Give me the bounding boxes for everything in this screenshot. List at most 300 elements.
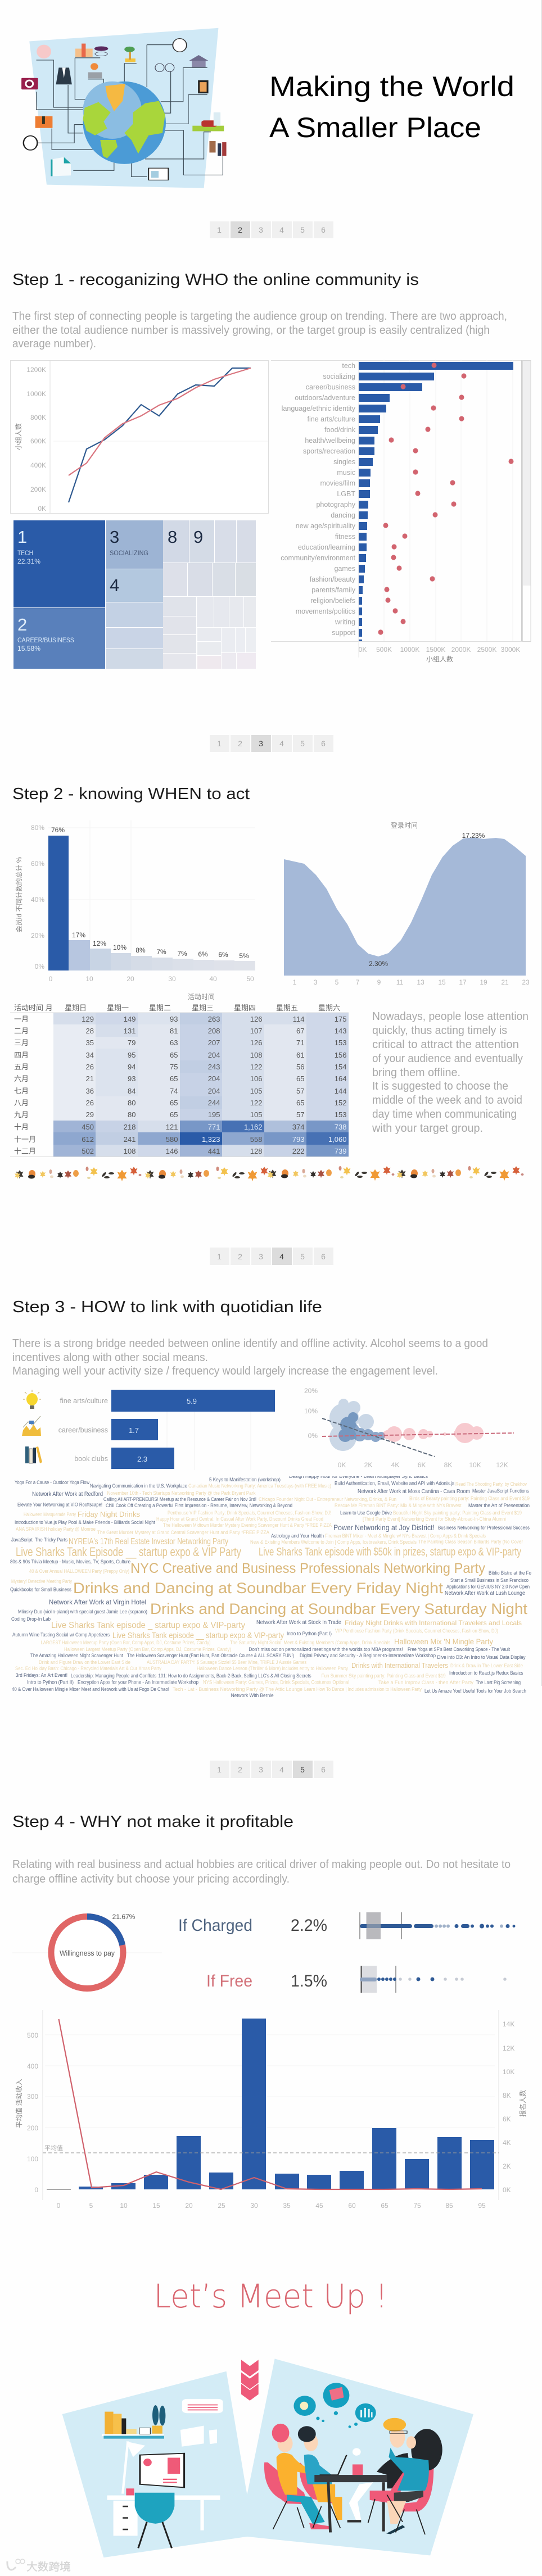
text block: when to act: of your audience and eventually bbox=[372, 1053, 523, 1065]
bar chart: member share by activity time: 10% bbox=[113, 944, 127, 951]
word cloud: event titles bbox=[10, 1473, 531, 1698]
pagination: page 4 active: 1 bbox=[217, 1252, 222, 1261]
heatmap table: month by weekday: 580 bbox=[166, 1135, 178, 1144]
word cloud: event titles: AUSTRALIA DAY PARTY: $ Sausage Sizzle! $5 Beer Wine, TRIPLE J Aussie Games bbox=[147, 1659, 306, 1665]
bar chart: member share by activity time: 活动时间 bbox=[188, 993, 215, 1001]
bar chart: fine arts, career, book clubs: 1.7 bbox=[129, 1426, 139, 1435]
stat: if charged: If Charged bbox=[178, 1916, 252, 1935]
word cloud: event titles: The Amazing Halloween Night Scavenger Hunt bbox=[30, 1653, 123, 1658]
bar chart with dots: categories by members: 1500K bbox=[426, 646, 445, 654]
heatmap table: month by weekday: 108 bbox=[250, 1051, 262, 1059]
bar chart with dots: categories by members: movies/film bbox=[320, 479, 355, 487]
bar chart with dots: categories by members: writing bbox=[335, 618, 355, 626]
word cloud: event titles: VIP Penthouse Fashion Party (Drink Specials, Gourmet Cheeses, Fashion Show, DJ) bbox=[335, 1628, 498, 1634]
treemap: category share: 4 bbox=[110, 575, 119, 595]
word cloud: event titles: November 10th - Tech Startups Networking Party @ the Park Bryant Park bbox=[107, 1490, 256, 1496]
bar chart: member share by activity time: 10 bbox=[85, 975, 93, 983]
heatmap table: month by weekday: 四月 bbox=[14, 1051, 29, 1059]
line chart: audience growth: 1000K bbox=[26, 390, 46, 398]
text block: when to act: with your target group. bbox=[372, 1122, 483, 1135]
heading: step 1: Step 1 - recoganizing WHO the online community is bbox=[12, 271, 419, 289]
word cloud: event titles: The Saturday Night Social: Meet & Existing Members (Comp Apps, Drink Specials bbox=[230, 1640, 390, 1645]
bar chart with dots: categories by members: 小组人数 bbox=[426, 655, 453, 663]
text block: step 4 intro bbox=[12, 1858, 511, 1885]
heatmap table: month by weekday: 243 bbox=[208, 1063, 220, 1071]
word cloud: event titles: Don't miss out on personalized meetings with the worlds top MBA programs! bbox=[249, 1647, 403, 1652]
word cloud: event titles: 40 & Over Halloween Mingle Mixer Meet and Network with Us at Fogo De Chao! bbox=[12, 1686, 169, 1692]
heatmap table: month by weekday: 三月 bbox=[14, 1038, 29, 1047]
heatmap table: month by weekday: 738 bbox=[335, 1123, 346, 1131]
heatmap table: month by weekday: 65 bbox=[170, 1051, 178, 1059]
heatmap table: month by weekday: 79 bbox=[128, 1038, 136, 1047]
heatmap table: month by weekday: 26 bbox=[86, 1099, 94, 1107]
pagination: page 3 active: 5 bbox=[300, 739, 305, 748]
leaf border strip bbox=[15, 1166, 524, 1181]
word cloud: event titles: Network After Work at Redford bbox=[32, 1491, 103, 1498]
word cloud: event titles: Master the Art of Presentation bbox=[468, 1503, 530, 1508]
illustration: office and meeting bbox=[62, 2359, 473, 2557]
combo chart: revenue and sign-ups by price: 5 bbox=[89, 2202, 93, 2210]
box plot: free events bbox=[360, 1966, 507, 1993]
heatmap table: month by weekday: 活动时间 月 bbox=[14, 1004, 53, 1012]
line chart: audience growth: 800K bbox=[30, 414, 46, 421]
heatmap table: month by weekday: 154 bbox=[335, 1063, 346, 1071]
heatmap table: month by weekday: 九月 bbox=[14, 1110, 29, 1119]
heatmap table: month by weekday: 六月 bbox=[14, 1074, 29, 1083]
word cloud: event titles: Leadership: Managing People and Conflicts bbox=[71, 1673, 156, 1679]
bubble scatter chart: 10% bbox=[304, 1407, 318, 1415]
text block: when to act: critical to attract the attention bbox=[372, 1038, 519, 1051]
heatmap table: month by weekday: 61 bbox=[296, 1051, 305, 1059]
word cloud: event titles: Quickbooks for Small Business bbox=[10, 1587, 71, 1593]
donut chart: willingness to pay: Willingness to pay bbox=[60, 1949, 115, 1957]
word cloud: event titles: The Great Murder Mystery at Grand Central Scavenger Hunt and Party *FREE PIZZA bbox=[97, 1530, 269, 1535]
bar chart: fine arts, career, book clubs: book clubs bbox=[74, 1455, 108, 1463]
treemap: category share: 15.58% bbox=[17, 645, 40, 652]
icon: career chart bbox=[22, 1416, 41, 1436]
heatmap table: month by weekday: 35 bbox=[86, 1038, 94, 1047]
bar chart: member share by activity time: 50 bbox=[246, 975, 254, 983]
bar chart with dots: categories by members: parents/family bbox=[311, 586, 356, 594]
word cloud: event titles: Calling All ART-PRENEURS! Meetup at the Resource & Career Fair on Nov 3rd! bbox=[103, 1496, 256, 1502]
word cloud: event titles: Introduction to Vue.js Play Pool & Make Friends - Billiards Social Night bbox=[15, 1520, 155, 1525]
stat: if free: If Free bbox=[206, 1972, 252, 1990]
bar chart with dots: categories by members: movements/politics bbox=[296, 607, 355, 615]
word cloud: event titles: Autumn Wine Tasting Social w/ Comp Appetizers bbox=[12, 1632, 110, 1638]
heatmap table: month by weekday: 75 bbox=[170, 1063, 178, 1071]
heatmap table: month by weekday: 204 bbox=[208, 1074, 220, 1083]
heatmap table: month by weekday: 122 bbox=[250, 1063, 262, 1071]
treemap: category share: 1 bbox=[17, 527, 27, 547]
heatmap table: month by weekday: 107 bbox=[250, 1027, 262, 1035]
heatmap table: month by weekday: 105 bbox=[250, 1110, 262, 1119]
pagination: page 3 active: 6 bbox=[321, 739, 326, 748]
bar chart: member share by activity time: 40 bbox=[209, 975, 217, 983]
word cloud: event titles: Build Authentication, Email, Website and API with Adonis.js bbox=[335, 1481, 454, 1486]
heatmap table: month by weekday: 739 bbox=[335, 1147, 346, 1155]
bar chart with dots: categories by members bbox=[271, 360, 531, 663]
combo chart: revenue and sign-ups by price: 75 bbox=[413, 2202, 421, 2210]
title: Making the World bbox=[269, 71, 514, 102]
combo chart: revenue and sign-ups by price: 35 bbox=[283, 2202, 291, 2210]
word cloud: event titles: Yoga For a Cause - Outdoor Yoga Flow bbox=[15, 1480, 89, 1485]
combo chart: revenue and sign-ups by price: 0K bbox=[503, 2186, 511, 2194]
stat: if charged: 2.2% bbox=[291, 1916, 327, 1935]
combo chart: revenue and sign-ups by price: 6K bbox=[503, 2115, 511, 2123]
bubble scatter chart: 2K bbox=[364, 1461, 372, 1469]
heatmap table: month by weekday: 81 bbox=[170, 1027, 178, 1035]
treemap: category share bbox=[13, 520, 256, 669]
treemap: category share: CAREER/BUSINESS bbox=[17, 636, 74, 644]
combo chart: revenue and sign-ups by price: 10 bbox=[120, 2202, 128, 2210]
heatmap table: month by weekday: 七月 bbox=[14, 1087, 29, 1095]
bubble scatter chart bbox=[304, 1387, 514, 1469]
word cloud: event titles: Drink & Draw in The Lower East Side bbox=[450, 1663, 523, 1668]
word cloud: event titles: Network After Work at Virgin Hotel bbox=[49, 1598, 146, 1606]
heatmap table: month by weekday: 57 bbox=[296, 1110, 305, 1119]
combo chart: revenue and sign-ups by price: 200 bbox=[27, 2124, 38, 2132]
line chart: audience growth bbox=[10, 360, 269, 514]
heatmap table: month by weekday: 114 bbox=[293, 1015, 305, 1023]
word cloud: event titles: Friday Night Drinks bbox=[78, 1510, 140, 1518]
heatmap table: month by weekday: 65 bbox=[296, 1074, 305, 1083]
bar chart with dots: categories by members: career/business bbox=[306, 383, 355, 391]
area chart: login time: 21 bbox=[501, 978, 509, 986]
bar chart: member share by activity time: 60% bbox=[31, 860, 44, 868]
bubble scatter chart: 0% bbox=[308, 1432, 318, 1440]
donut chart: willingness to pay bbox=[12, 1913, 162, 1988]
word cloud: event titles: NYS Halloween Party: Games, Prizes, Drink Specials, Costumes Optional bbox=[203, 1680, 349, 1685]
treemap: category share: 2 bbox=[17, 615, 27, 634]
watermark: 大数跨境: 大数跨境 bbox=[26, 2561, 71, 2573]
heatmap table: month by weekday: 131 bbox=[124, 1027, 136, 1035]
text block: when to act: day time when communicating bbox=[372, 1108, 517, 1121]
word cloud: event titles: The Last Pig Screening bbox=[476, 1680, 521, 1685]
heatmap table: month by weekday: 793 bbox=[292, 1135, 305, 1144]
bar chart: member share by activity time: 40% bbox=[31, 896, 44, 904]
pagination: page 5 active bbox=[210, 1761, 333, 1778]
word cloud: event titles: LARGEST Halloween Meetup Party (Open Bar, Comp Apps, DJ, Costume Prizes, Candy) bbox=[40, 1640, 211, 1645]
combo chart: revenue and sign-ups by price: 平均值 bbox=[44, 2144, 63, 2152]
pagination: page 3 active: 1 bbox=[217, 739, 222, 748]
bar chart with dots: categories by members: 1000K bbox=[400, 646, 419, 654]
word cloud: event titles: Elevate Your Networking at VIO Rooftscape! bbox=[17, 1502, 102, 1507]
word cloud: event titles: Drink and Figure Draw on the Lower East Side bbox=[39, 1659, 130, 1665]
word cloud: event titles: 101: How to do Assignments, Back-2-Back, Selling LLC's & All Closing Secrets bbox=[159, 1673, 311, 1679]
heatmap table: month by weekday: 二月 bbox=[14, 1027, 29, 1035]
pagination: page 5 active: 3 bbox=[259, 1765, 263, 1774]
bar chart with dots: categories by members: fashion/beauty bbox=[310, 575, 356, 583]
heatmap table: month by weekday: 374 bbox=[292, 1123, 305, 1131]
bar chart: fine arts, career, book clubs: 5.9 bbox=[187, 1397, 197, 1405]
combo chart: revenue and sign-ups by price: 30 bbox=[250, 2202, 258, 2210]
heatmap table: month by weekday: 34 bbox=[86, 1051, 94, 1059]
heatmap table: month by weekday: 65 bbox=[296, 1099, 305, 1107]
bar chart with dots: categories by members: health/wellbeing bbox=[305, 437, 355, 445]
treemap: category share: 3 bbox=[110, 527, 119, 547]
heatmap table: month by weekday: 222 bbox=[292, 1147, 305, 1155]
heatmap table: month by weekday: 36 bbox=[86, 1087, 94, 1095]
heatmap table: month by weekday: 94 bbox=[128, 1063, 136, 1071]
title: A Smaller Place bbox=[269, 112, 481, 143]
word cloud: event titles: Power Networking at Joy District! bbox=[333, 1523, 435, 1532]
heatmap table: month by weekday: 星期四 bbox=[234, 1004, 256, 1012]
heatmap table: month by weekday: 105 bbox=[250, 1087, 262, 1095]
word cloud: event titles: 3rd Fridays: An Art Event! bbox=[16, 1672, 67, 1678]
bar chart with dots: categories by members: dancing bbox=[331, 511, 355, 519]
word cloud: event titles: Fun Summer Sky painting party: Painting Class and Event $19 bbox=[322, 1673, 446, 1679]
heatmap table: month by weekday: 1,060 bbox=[328, 1135, 346, 1144]
word cloud: event titles: Tech - Lat - Business Networking Party @ The Attic Lounge bbox=[173, 1686, 302, 1692]
word cloud: event titles: Live Sharks Tank episode __ startup expo & VIP-party bbox=[112, 1631, 284, 1640]
heading: let's meet up: Let’s Meet Up ! bbox=[154, 2277, 388, 2315]
word cloud: event titles: Chicago Founder Night Out - Entrepreneur Networking, Drinks, & Fun bbox=[259, 1496, 396, 1502]
heading: step 4: Step 4 - WHY not make it profitable bbox=[12, 1813, 293, 1831]
bar chart: member share by activity time: 6% bbox=[198, 950, 208, 958]
heatmap table: month by weekday: 74 bbox=[170, 1087, 178, 1095]
icon: light bulb bbox=[23, 1390, 41, 1409]
pagination: page 5 active: 4 bbox=[279, 1765, 284, 1774]
heatmap table: month by weekday: 144 bbox=[335, 1087, 346, 1095]
word cloud: event titles: ANA SPA IRISH holiday Party @ Monroe bbox=[16, 1526, 96, 1532]
area chart: login time: 17 bbox=[459, 978, 467, 986]
bar chart with dots: categories by members: 0K bbox=[359, 646, 367, 654]
area chart: login time: 3 bbox=[314, 978, 318, 986]
bar chart: member share by activity time: 5% bbox=[239, 952, 249, 960]
word cloud: event titles: Navigating Communication in the U.S. Workplace bbox=[90, 1483, 187, 1489]
word cloud: event titles: The Halloween Scavenger Hunt (Part Hunt, Part Obstacle Course & ALL SCARY FUN!) bbox=[127, 1653, 294, 1658]
heatmap table: month by weekday: 108 bbox=[124, 1147, 136, 1155]
heatmap table: month by weekday: 56 bbox=[296, 1063, 305, 1071]
bar chart: member share by activity time bbox=[15, 820, 255, 1001]
bubble scatter chart: 6K bbox=[418, 1461, 426, 1469]
word cloud: event titles: Halloween Masquerade Party bbox=[24, 1512, 76, 1517]
heading: step 3: Step 3 - HOW to link with quotidian life bbox=[12, 1298, 322, 1316]
heatmap table: month by weekday: 93 bbox=[170, 1015, 178, 1023]
area chart: login time: 15 bbox=[438, 978, 446, 986]
pagination: page 5 active: 1 bbox=[217, 1765, 222, 1774]
line chart: audience growth: 0K bbox=[38, 505, 46, 513]
pagination: page 2 active: 1 bbox=[217, 225, 222, 234]
bar chart: member share by activity time: 0% bbox=[35, 963, 44, 970]
word cloud: event titles: Learn to Use Google Drive bbox=[340, 1510, 392, 1516]
word cloud: event titles: Halloween Dance Lesson (Thriller & More) includes entry to Halloween Party bbox=[197, 1666, 348, 1671]
bar chart: member share by activity time: 76% bbox=[51, 826, 65, 834]
word cloud: event titles: Start a Small Business in San Francisco bbox=[450, 1577, 529, 1583]
word cloud: event titles: Live Sharks Tank episode _ startup expo & VIP-party bbox=[51, 1621, 245, 1630]
heatmap table: month by weekday: 129 bbox=[82, 1015, 94, 1023]
combo chart: revenue and sign-ups by price: 14K bbox=[503, 2020, 514, 2028]
heatmap table: month by weekday: 208 bbox=[208, 1027, 220, 1035]
title bbox=[269, 71, 514, 143]
heatmap table: month by weekday: 65 bbox=[170, 1074, 178, 1083]
heatmap table: month by weekday: 128 bbox=[250, 1147, 262, 1155]
word cloud: event titles: Beautiful Night Sky painting party: Painting Class and Event $19 bbox=[393, 1510, 522, 1516]
text block: step 4 intro: charge offline activity but choose your pricing accordingly. bbox=[12, 1873, 290, 1885]
donut chart: willingness to pay: 21.67% bbox=[112, 1913, 136, 1921]
bar chart with dots: categories by members: language/ethnic identity bbox=[282, 405, 356, 412]
treemap: category share: TECH bbox=[17, 549, 33, 557]
bar chart with dots: categories by members: photography bbox=[316, 501, 356, 509]
heatmap table: month by weekday: 80 bbox=[128, 1110, 136, 1119]
text block: step 3 intro: incentives along with other social means. bbox=[12, 1352, 208, 1364]
pagination: page 5 active: 5 bbox=[300, 1765, 305, 1774]
heatmap table: month by weekday: 1,323 bbox=[202, 1135, 220, 1144]
stat: if free: 1.5% bbox=[291, 1972, 327, 1990]
box plot: charged events bbox=[360, 1912, 515, 1939]
combo chart: revenue and sign-ups by price: 100 bbox=[27, 2155, 38, 2163]
bar chart with dots: categories by members: 2500K bbox=[477, 646, 496, 654]
word cloud: event titles: Network After Work at Lush Lounge bbox=[445, 1590, 525, 1597]
heatmap table: month by weekday: 241 bbox=[124, 1135, 136, 1144]
heatmap table: month by weekday: 771 bbox=[208, 1123, 220, 1131]
word cloud: event titles: Encryption Apps for your Phone - An Intermediate Workshop bbox=[78, 1680, 198, 1685]
bar chart with dots: categories by members: religion/beliefs bbox=[310, 597, 355, 605]
heatmap table: month by weekday: 84 bbox=[128, 1087, 136, 1095]
bar chart: member share by activity time: 30 bbox=[168, 975, 176, 983]
area chart: login time: 登录时间 bbox=[391, 821, 418, 829]
bar chart with dots: categories by members: outdoors/adventure bbox=[295, 394, 355, 402]
heatmap table: month by weekday: 57 bbox=[296, 1087, 305, 1095]
word cloud: event titles: Applications for GENIUS NY 2.0 Now Open bbox=[446, 1584, 530, 1590]
heatmap table: month by weekday: 星期三 bbox=[192, 1004, 214, 1012]
area chart: login time: 5 bbox=[335, 978, 339, 986]
pagination: page 2 active: 2 bbox=[238, 225, 242, 234]
heatmap table: month by weekday: 65 bbox=[170, 1099, 178, 1107]
text block: step 3 intro: There is a strong bridge needed between online identify and offline activity. Alcohol seems to a good bbox=[12, 1337, 488, 1350]
bar chart with dots: categories by members: 2000K bbox=[451, 646, 471, 654]
combo chart: revenue and sign-ups by price: 65 bbox=[381, 2202, 389, 2210]
word cloud: event titles: Live Sharks Tank Episode __ startup expo & VIP Party bbox=[16, 1545, 241, 1559]
heatmap table: month by weekday: 65 bbox=[170, 1110, 178, 1119]
heatmap table: month by weekday: 71 bbox=[296, 1038, 305, 1047]
bar chart with dots: categories by members: LGBT bbox=[337, 490, 355, 498]
word cloud: event titles: Halloween Mix 'N Mingle Party bbox=[394, 1637, 493, 1646]
heatmap table: month by weekday: 164 bbox=[335, 1074, 346, 1083]
heatmap table: month by weekday bbox=[10, 1004, 349, 1157]
word cloud: event titles: Rescue Me Fireman BiNT Party: Mix & Mingle with NYs Bravest bbox=[335, 1503, 462, 1508]
word cloud: event titles: Sec. Ed Holiday Bash: Chicago - Recycled Materials Art & Our Xmas Party bbox=[15, 1666, 161, 1671]
line chart: audience growth: 400K bbox=[30, 461, 46, 469]
combo chart: revenue and sign-ups by price: 10K bbox=[503, 2068, 514, 2076]
heatmap table: month by weekday: 612 bbox=[82, 1135, 94, 1144]
word cloud: event titles: Network After Work at Stock In Trade bbox=[256, 1620, 341, 1626]
word cloud: event titles: Read The Shooting Party, by Chekhov bbox=[455, 1481, 527, 1487]
text block: step 3 intro: Managing well your activity size / frequency would largely increase the engagement level. bbox=[12, 1365, 438, 1377]
word cloud: event titles: Learn How To Dance | Includes admission to Halloween Party bbox=[304, 1686, 422, 1692]
bar chart: member share by activity time: 7% bbox=[156, 948, 166, 956]
heatmap table: month by weekday: 29 bbox=[86, 1110, 94, 1119]
bar chart with dots: categories by members: education/learning bbox=[298, 543, 355, 551]
heatmap table: month by weekday: 星期六 bbox=[318, 1004, 340, 1012]
heatmap table: month by weekday: 122 bbox=[250, 1099, 262, 1107]
watermark: 大数跨境 bbox=[7, 2559, 71, 2573]
word cloud: event titles: Mystery/ Detective Meeting Party bbox=[11, 1579, 72, 1584]
word cloud: event titles: [Third Party Event] Networking Event for Study-Abroad-In-China Alumni bbox=[363, 1516, 506, 1522]
pagination: page 3 active: 3 bbox=[259, 739, 263, 748]
word cloud: event titles: Dive into D3: An Intro to Visual Data Display bbox=[437, 1654, 526, 1660]
heatmap table: month by weekday: 244 bbox=[208, 1099, 220, 1107]
bubble scatter chart: 12K bbox=[496, 1461, 508, 1469]
pagination: page 2 active: 5 bbox=[300, 225, 305, 234]
word cloud: event titles: Network With Bernie bbox=[231, 1693, 274, 1698]
word cloud: event titles: 40 & Over Annual HALLOWEEN Party (Preppy Only) bbox=[29, 1568, 129, 1574]
combo chart: revenue and sign-ups by price: 报名人数 bbox=[518, 2090, 527, 2117]
heatmap table: month by weekday: 63 bbox=[170, 1038, 178, 1047]
heatmap table: month by weekday: 95 bbox=[128, 1051, 136, 1059]
heatmap table: month by weekday: 126 bbox=[250, 1038, 262, 1047]
pagination: page 3 active: 4 bbox=[279, 739, 284, 748]
word cloud: event titles: Coding Drop-In Lab bbox=[11, 1616, 51, 1622]
word cloud: event titles: New & Existing Members Welcome to Join | Comp Apps, Icebreakers, Drink Specials bbox=[250, 1539, 417, 1545]
word cloud: event titles: NYC Creative and Business Professionals Networking Party bbox=[130, 1561, 485, 1576]
heatmap table: month by weekday: 558 bbox=[250, 1135, 262, 1144]
treemap: category share: SOCIALIZING bbox=[110, 549, 148, 557]
bar chart: member share by activity time: 6% bbox=[218, 951, 228, 959]
area chart: login time: 19 bbox=[480, 978, 487, 986]
heatmap table: month by weekday: 28 bbox=[86, 1027, 94, 1035]
word cloud: event titles: Canadian Music Networking Party: America Tuesdays (with FREE Music) bbox=[188, 1483, 331, 1489]
bar chart with dots: categories by members: fine arts/culture bbox=[308, 415, 355, 423]
line chart: audience growth: 小组人数 bbox=[14, 423, 22, 450]
bubble scatter chart: 20% bbox=[304, 1387, 318, 1395]
heatmap table: month by weekday: 195 bbox=[208, 1110, 220, 1119]
area chart: login time: 17.23% bbox=[462, 832, 485, 840]
bar chart with dots: categories by members: 500K bbox=[376, 646, 392, 654]
heatmap table: month by weekday: 441 bbox=[208, 1147, 220, 1155]
word cloud: event titles: 80s & 90s Trivia Meetup - Music, Movies, TV, Sports, Culture bbox=[10, 1559, 130, 1564]
area chart: login time: 23 bbox=[522, 978, 530, 986]
area chart: login time: 9 bbox=[377, 978, 381, 986]
combo chart: revenue and sign-ups by price: 25 bbox=[218, 2202, 225, 2210]
bubble scatter chart: 4K bbox=[391, 1461, 399, 1469]
word cloud: event titles: The Halloween Midtown Murder Mystery Evening Scavenger Hunt & Party *FREE PIZZA bbox=[163, 1522, 332, 1528]
word cloud: event titles: Business Networking for Professional Success bbox=[438, 1525, 530, 1531]
bar chart with dots: categories by members: sports/recreation bbox=[303, 447, 355, 455]
bar chart: member share by activity time: 12% bbox=[93, 940, 106, 947]
heatmap table: month by weekday: 146 bbox=[166, 1147, 178, 1155]
word cloud: event titles: Fireman BiNT Mixer - Meet & Mingle w/ NYs Bravest | Comp Apps & Drink Specials bbox=[325, 1533, 486, 1539]
combo chart: revenue and sign-ups by price: 平均值 活动收入 bbox=[15, 2079, 23, 2128]
pagination: page 4 active bbox=[210, 1248, 333, 1265]
word cloud: event titles: Introduction to React.js Redux Basics bbox=[449, 1670, 523, 1676]
area chart: login time: 13 bbox=[417, 978, 424, 986]
heatmap table: month by weekday: 218 bbox=[124, 1123, 136, 1131]
bar chart: member share by activity time: 17% bbox=[72, 931, 85, 939]
text block: step 1 intro: average number). bbox=[12, 338, 96, 350]
area chart: login time bbox=[284, 821, 530, 986]
heatmap table: month by weekday: 502 bbox=[82, 1147, 94, 1155]
word cloud: event titles: Astrology and Your Health bbox=[271, 1533, 324, 1539]
word cloud: event titles: JavaScript: The Tricky Parts bbox=[11, 1537, 67, 1543]
combo chart: revenue and sign-ups by price: 500 bbox=[27, 2031, 38, 2039]
heatmap table: month by weekday: 80 bbox=[128, 1099, 136, 1107]
treemap: category share: 22.31% bbox=[17, 557, 40, 565]
word cloud: event titles: Intro to Python (Part I) bbox=[287, 1631, 332, 1636]
heatmap table: month by weekday: 450 bbox=[82, 1123, 94, 1131]
word cloud: event titles: Happy Hour at Grand Central: In Casual After Work Party, Discount Drinks Great Food bbox=[156, 1516, 323, 1522]
line chart: audience growth: 200K bbox=[30, 486, 46, 493]
combo chart: revenue and sign-ups by price: 0 bbox=[57, 2202, 61, 2210]
bar chart: member share by activity time: 0 bbox=[49, 975, 53, 983]
bar chart: fine arts, career, book clubs: career/business bbox=[58, 1426, 108, 1434]
heatmap table: month by weekday: 106 bbox=[250, 1074, 262, 1083]
bar chart with dots: categories by members: singles bbox=[333, 458, 355, 466]
bar chart: member share by activity time: 会员id 不同计数的总计 % bbox=[15, 856, 23, 932]
word cloud: event titles: Let Us Amaze You! Useful Tools for Your Job Search bbox=[424, 1688, 526, 1694]
heatmap table: month by weekday: 十一月 bbox=[14, 1135, 36, 1144]
word cloud: event titles: Friday Night Drinks with International Travelers and Locals bbox=[345, 1619, 522, 1627]
